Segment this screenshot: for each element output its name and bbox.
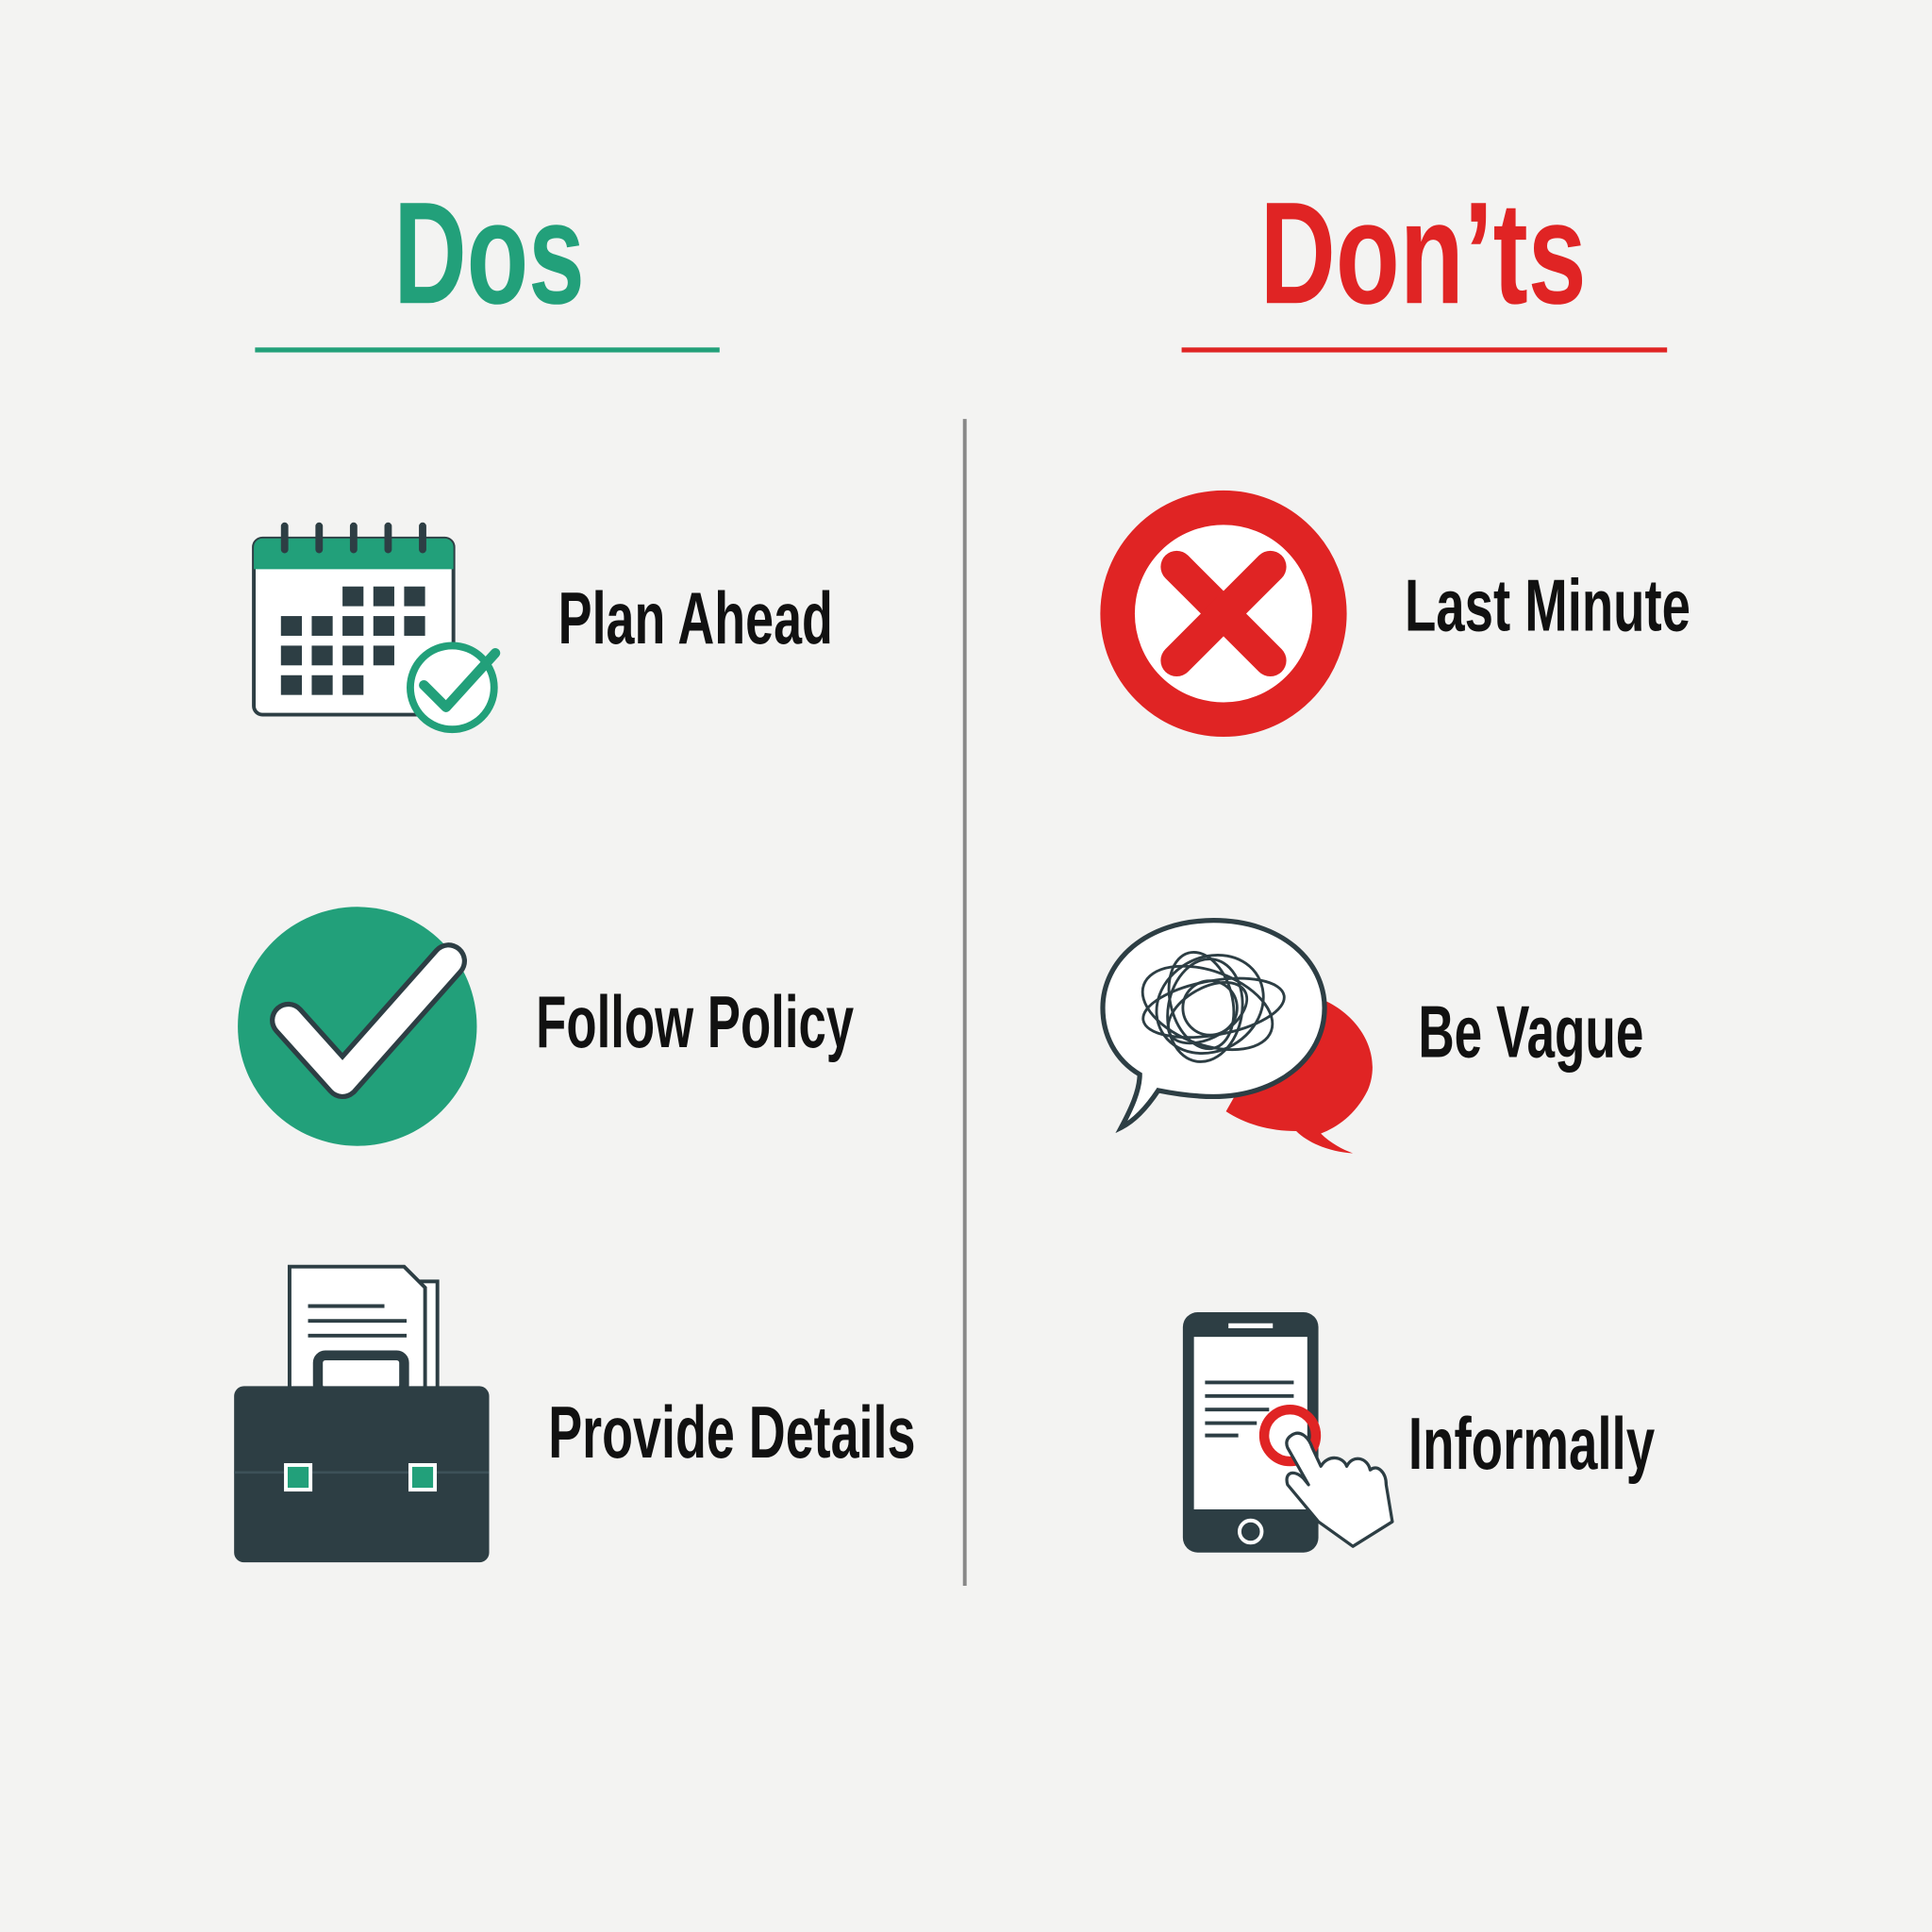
title: Don'ts (1182, 171, 1667, 353)
icon: phone with tap (1183, 1312, 1392, 1553)
title: Dos: Dos (393, 171, 585, 334)
label: Provide Details: Provide Details (548, 1391, 915, 1474)
icon: calendar (254, 526, 495, 729)
icon: briefcase with documents (234, 1267, 490, 1562)
label: Last Minute: Last Minute (1405, 564, 1690, 647)
icon: X circle (1118, 508, 1329, 720)
label: Follow Policy: Follow Policy (536, 980, 854, 1063)
title: Don'ts: Don’ts (1260, 171, 1587, 334)
label: Informally: Informally (1408, 1402, 1655, 1485)
label: Be Vague: Be Vague (1418, 991, 1643, 1074)
icon: check circle (238, 907, 476, 1146)
icon: speech bubbles (1103, 921, 1373, 1154)
label: Plan Ahead: Plan Ahead (558, 576, 833, 659)
title: Dos (255, 171, 720, 353)
